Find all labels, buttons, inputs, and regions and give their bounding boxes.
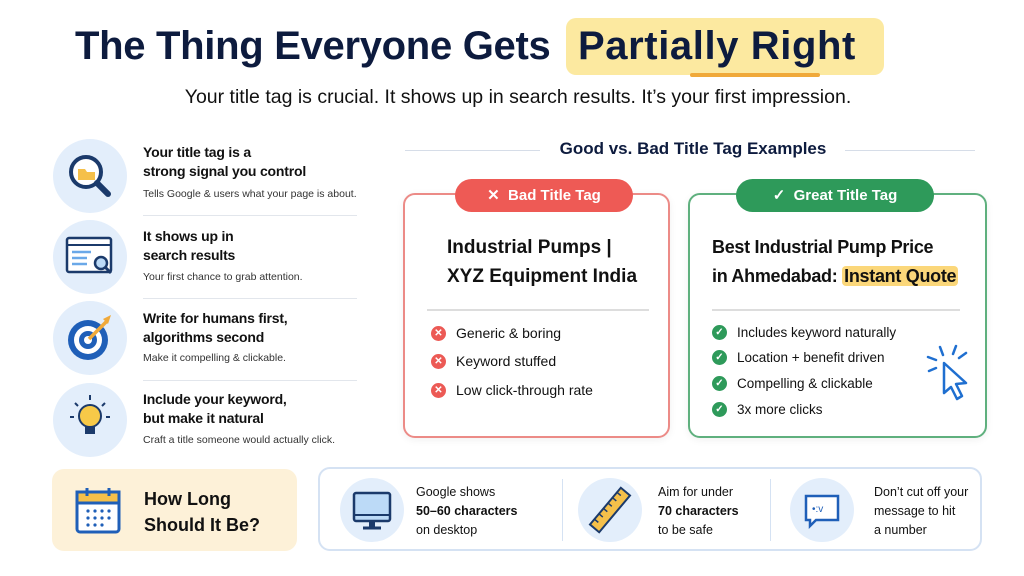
list: bad points: ✕ (434, 356, 443, 366)
panel: great title tag: Best Industrial Pump Price (712, 237, 933, 257)
list: bad points: Low click-through rate (456, 382, 593, 398)
list: bad points: ✕ (434, 384, 443, 396)
panel: length facts: Aim for under (658, 485, 733, 499)
panel: length facts: Don’t cut off your (874, 485, 968, 499)
icon: message (790, 478, 854, 542)
text: keyword (143, 391, 287, 426)
text: signal: Your title tag is a (143, 144, 251, 160)
panel: great title tag: in Ahmedabad: Instant Quote (712, 266, 956, 286)
list: good points: Includes keyword naturally (737, 325, 896, 340)
panel: bad title tag: XYZ Equipment India (447, 266, 637, 287)
text: humans (143, 310, 288, 345)
panel: length facts: to be safe (658, 523, 713, 537)
text: keyword: but make it natural (143, 410, 264, 426)
pill: bad (455, 179, 633, 212)
icon: monitor (340, 478, 404, 542)
list: good points: ✓ (715, 404, 724, 415)
title: The Thing Everyone Gets (75, 24, 550, 68)
icon: lightbulb (53, 383, 127, 457)
list: good points (712, 325, 896, 417)
text: Your first chance to grab attention. (143, 271, 303, 283)
list: good points: ✓ (715, 352, 724, 363)
list: good points: ✓ (715, 378, 724, 389)
text: keyword: Include your keyword, (143, 391, 287, 407)
panel: length facts: Google shows (416, 485, 495, 499)
icon: message: •:v (812, 504, 823, 515)
highlight (566, 18, 884, 75)
heading: examples: Good vs. Bad Title Tag Examples (560, 139, 826, 158)
list: good points: Location + benefit driven (737, 350, 884, 365)
text: humans: Write for humans first, (143, 310, 288, 326)
title: Partially Right (578, 24, 856, 68)
icon: magnifier folder (53, 139, 127, 213)
panel: how long (52, 469, 297, 551)
text: search results (143, 228, 235, 263)
panel: how long: How Long (144, 489, 231, 509)
text: Craft a title someone would actually click. (143, 434, 335, 446)
icon: target (53, 301, 127, 375)
text: signal: strong signal you control (143, 163, 306, 179)
text: humans: algorithms second (143, 329, 264, 345)
icon: browser search (53, 220, 127, 294)
panel: length facts: 50–60 characters (416, 504, 517, 518)
text: Tells Google & users what your page is about. (143, 188, 357, 200)
title (75, 18, 884, 77)
text: search results: search results (143, 247, 235, 263)
text: Make it compelling & clickable. (143, 352, 286, 364)
pill: bad: ✕ Bad Title Tag (487, 187, 601, 204)
panel: bad title tag: Industrial Pumps | (447, 237, 612, 258)
list: bad points: Keyword stuffed (456, 353, 556, 369)
text: search results: It shows up in (143, 228, 234, 244)
list: bad points: Generic & boring (456, 325, 561, 341)
pill: great: ✓ Great Title Tag (773, 187, 897, 204)
list: good points: 3x more clicks (737, 402, 823, 417)
list: bad points: ✕ (434, 328, 443, 338)
list: good points: Compelling & clickable (737, 376, 873, 391)
panel: bad title tag (403, 193, 670, 438)
panel: length facts: on desktop (416, 523, 477, 537)
panel: length facts (318, 467, 982, 551)
text: signal (143, 144, 306, 179)
icon: calendar (76, 488, 120, 534)
panel: length facts: message to hit (874, 504, 955, 518)
icon: ruler (578, 478, 642, 542)
panel: great title tag (688, 193, 987, 438)
panel: length facts: a number (874, 523, 927, 537)
panel: length facts: 70 characters (658, 504, 739, 518)
pill: great (736, 179, 934, 212)
list: good points: ✓ (715, 327, 724, 338)
icon: cursor click (926, 344, 968, 400)
list: bad points (431, 325, 593, 398)
subtitle: Your title tag is crucial. It shows up in search results. It’s your first impression. (185, 86, 851, 108)
panel: how long: Should It Be? (144, 515, 260, 535)
